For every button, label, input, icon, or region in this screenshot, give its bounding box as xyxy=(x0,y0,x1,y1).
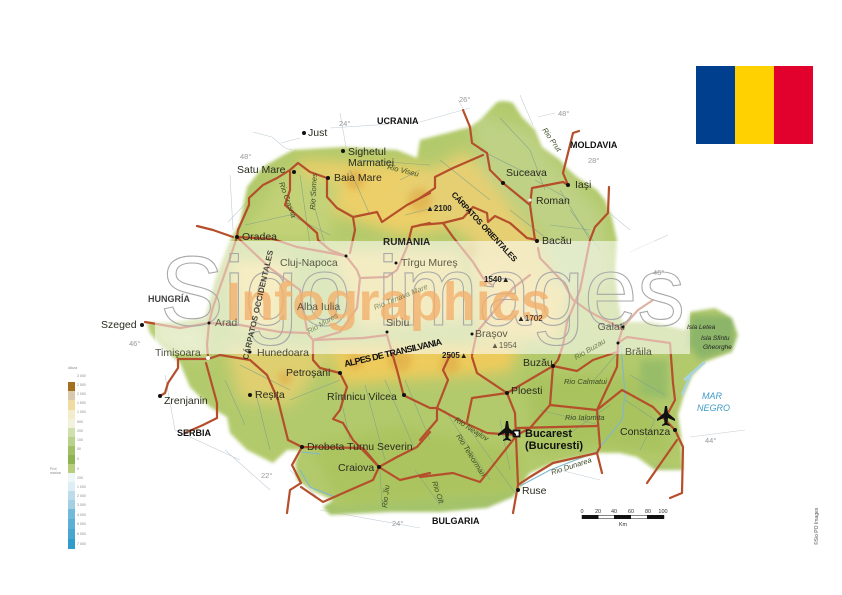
elevation legend: 3 000 xyxy=(77,374,86,378)
city labels: Baia Mare xyxy=(334,172,382,184)
elevation legend: 0 xyxy=(77,457,79,461)
delta and sea labels: Isla Letea xyxy=(687,324,716,331)
city labels: Marmatiei xyxy=(348,157,394,169)
graticule labels: 46° xyxy=(653,268,664,277)
elevation legend: 1 500 xyxy=(77,401,86,405)
scale bar: 20 xyxy=(595,509,601,515)
elevation legend: Prof. xyxy=(50,467,57,471)
graticule labels: 28° xyxy=(588,156,599,165)
mountain range labels: CÁRPATOS OCCIDENTALES xyxy=(241,249,275,360)
city labels: Iaşi xyxy=(575,179,591,191)
elevation legend: 1 000 xyxy=(77,410,86,414)
peaks: ▲1954 xyxy=(491,341,517,350)
neighbouring countries rivers and graticule xyxy=(165,95,745,528)
city labels: Timişoara xyxy=(155,347,201,359)
peaks: ▲1702 xyxy=(517,314,543,323)
graticule labels: 26° xyxy=(459,95,470,104)
river labels: Rio Viseu xyxy=(387,162,421,179)
delta and sea labels: MAR xyxy=(702,391,722,401)
scale bar: 80 xyxy=(645,509,651,515)
city labels: Alba Iulia xyxy=(297,301,340,313)
city labels: Braşov xyxy=(475,328,508,340)
capital marker xyxy=(514,430,520,436)
city labels: Constanza xyxy=(620,426,670,438)
river labels: Rio Neajlov xyxy=(453,415,491,444)
country labels: HUNGRÍA xyxy=(148,294,190,304)
scale bar: 60 xyxy=(628,509,634,515)
city labels: Galati xyxy=(598,321,625,333)
city labels: Zrenjanin xyxy=(164,395,208,407)
elevation legend: 1 000 xyxy=(77,485,86,489)
city labels: Rîmnicu Vilcea xyxy=(327,391,397,403)
river labels: Rio Jiu xyxy=(380,484,391,508)
scale bar xyxy=(580,509,668,528)
city labels: Brăila xyxy=(625,346,652,358)
elevation legend: Altura xyxy=(68,366,77,370)
elevation legend: 5 000 xyxy=(77,522,86,526)
graticule labels: 48° xyxy=(558,109,569,118)
watermark: orange wordmark: Infographics xyxy=(226,272,551,332)
elevation legend: 2 000 xyxy=(77,392,86,396)
delta lagoon xyxy=(682,362,705,395)
graticule labels xyxy=(129,95,716,528)
river labels: Rio Prut xyxy=(540,126,564,154)
peaks xyxy=(426,204,543,360)
river labels: Rio Mures xyxy=(306,311,340,336)
graticule labels: 24° xyxy=(339,119,350,128)
peaks: ▲2100 xyxy=(426,204,452,213)
city labels: Buzău xyxy=(523,357,553,369)
country labels: UCRANIA xyxy=(377,116,419,126)
river labels: Rio Olt xyxy=(430,480,446,505)
river labels: Rio Somes xyxy=(308,173,319,210)
elevation legend: 200 xyxy=(77,476,83,480)
scale bar: 0 xyxy=(580,509,584,515)
city labels: Reşiţa xyxy=(255,389,285,401)
icon: airport Constanza xyxy=(657,406,675,426)
river labels: Rio Tirnava Mare xyxy=(372,282,429,312)
graticule labels: 48° xyxy=(240,152,251,161)
city labels: Craiova xyxy=(338,462,374,474)
city labels: Petroşani xyxy=(286,367,330,379)
flag of Romania xyxy=(696,66,813,144)
elevation legend: 3 000 xyxy=(77,503,86,507)
delta and sea labels: Gheorghe xyxy=(703,344,732,351)
city labels: Sighetul xyxy=(348,146,386,158)
elevation legend: 6 000 xyxy=(77,532,86,536)
credit: ©Sio PO Images xyxy=(813,507,820,545)
river labels: Rio Ialomita xyxy=(565,413,605,422)
elevation legend: 0 xyxy=(77,467,79,471)
elevation legend: marina xyxy=(50,471,61,475)
map of Romania: relief xyxy=(130,90,750,530)
city labels: Drobeta Turnu Severin xyxy=(307,441,413,453)
city labels: Bacău xyxy=(542,235,572,247)
delta and sea labels: NEGRO xyxy=(697,403,730,413)
city labels: Satu Mare xyxy=(237,164,286,176)
graticule labels: 24° xyxy=(392,519,403,528)
orange relief spots xyxy=(278,170,477,385)
city labels: Tîrgu Mureş xyxy=(401,257,458,269)
country labels xyxy=(148,116,618,526)
elevation legend xyxy=(50,366,86,549)
elevation legend: 500 xyxy=(77,420,83,424)
scale bar: Km xyxy=(619,522,628,528)
elevation legend: 2 000 xyxy=(77,494,86,498)
river labels: Rio Buzau xyxy=(572,336,608,362)
river labels: Rio Teleorman xyxy=(454,432,488,478)
mountain range labels xyxy=(241,190,519,369)
elevation legend: 100 xyxy=(77,438,83,442)
graticule labels: 22° xyxy=(261,471,272,480)
elevation legend: 2 500 xyxy=(77,383,86,387)
elevation legend: 200 xyxy=(77,429,83,433)
river labels: Rio Crasna xyxy=(277,181,298,219)
icon: airport Bucarest xyxy=(498,421,516,441)
watermark band xyxy=(155,241,690,354)
city labels xyxy=(101,127,670,497)
rivers xyxy=(225,118,665,505)
country labels: BULGARIA xyxy=(432,516,480,526)
peaks: 1540▲ xyxy=(484,275,510,284)
river labels: Rio Dunarea xyxy=(550,455,593,477)
city labels: Roman xyxy=(536,195,570,207)
road network xyxy=(145,110,683,513)
country labels: RUMANIA xyxy=(383,237,430,248)
country labels: MOLDAVIA xyxy=(570,140,618,150)
delta and sea labels: Isla Sfintu xyxy=(701,335,730,342)
scale bar: 100 xyxy=(658,509,668,515)
mountain range labels: CÁRPATOS ORIENTALES xyxy=(450,190,519,264)
country labels: SERBIA xyxy=(177,428,212,438)
river labels xyxy=(277,126,608,508)
delta and sea labels xyxy=(687,324,732,413)
peaks: 2505▲ xyxy=(442,351,468,360)
city labels: Sibiu xyxy=(386,317,410,329)
river Danube xyxy=(300,345,625,497)
elevation legend: 50 xyxy=(77,447,81,451)
elevation legend: 4 000 xyxy=(77,513,86,517)
mountain range labels: ALPES DE TRANSILVANIA xyxy=(343,337,443,369)
city labels: Ploesti xyxy=(511,385,543,397)
river labels: Rio Calmatui xyxy=(564,377,607,386)
city labels: Hunedoara xyxy=(257,347,309,359)
watermark: grey outline wordmark: Sigo images xyxy=(160,236,685,346)
city labels: Oradea xyxy=(242,231,277,243)
city labels: Just xyxy=(308,127,327,139)
graticule labels: 46° xyxy=(129,339,140,348)
city labels: Cluj-Napoca xyxy=(280,257,338,269)
elevation legend: 7 000 xyxy=(77,542,86,546)
city labels: (Bucuresti) xyxy=(525,440,583,452)
city labels: Suceava xyxy=(506,167,547,179)
city labels: Szeged xyxy=(101,319,137,331)
graticule labels: 44° xyxy=(705,436,716,445)
city labels: Bucarest xyxy=(525,428,572,440)
scale bar: 40 xyxy=(611,509,617,515)
city labels: Arad xyxy=(215,317,237,329)
city markers xyxy=(140,131,677,492)
city labels: Ruse xyxy=(522,485,547,497)
